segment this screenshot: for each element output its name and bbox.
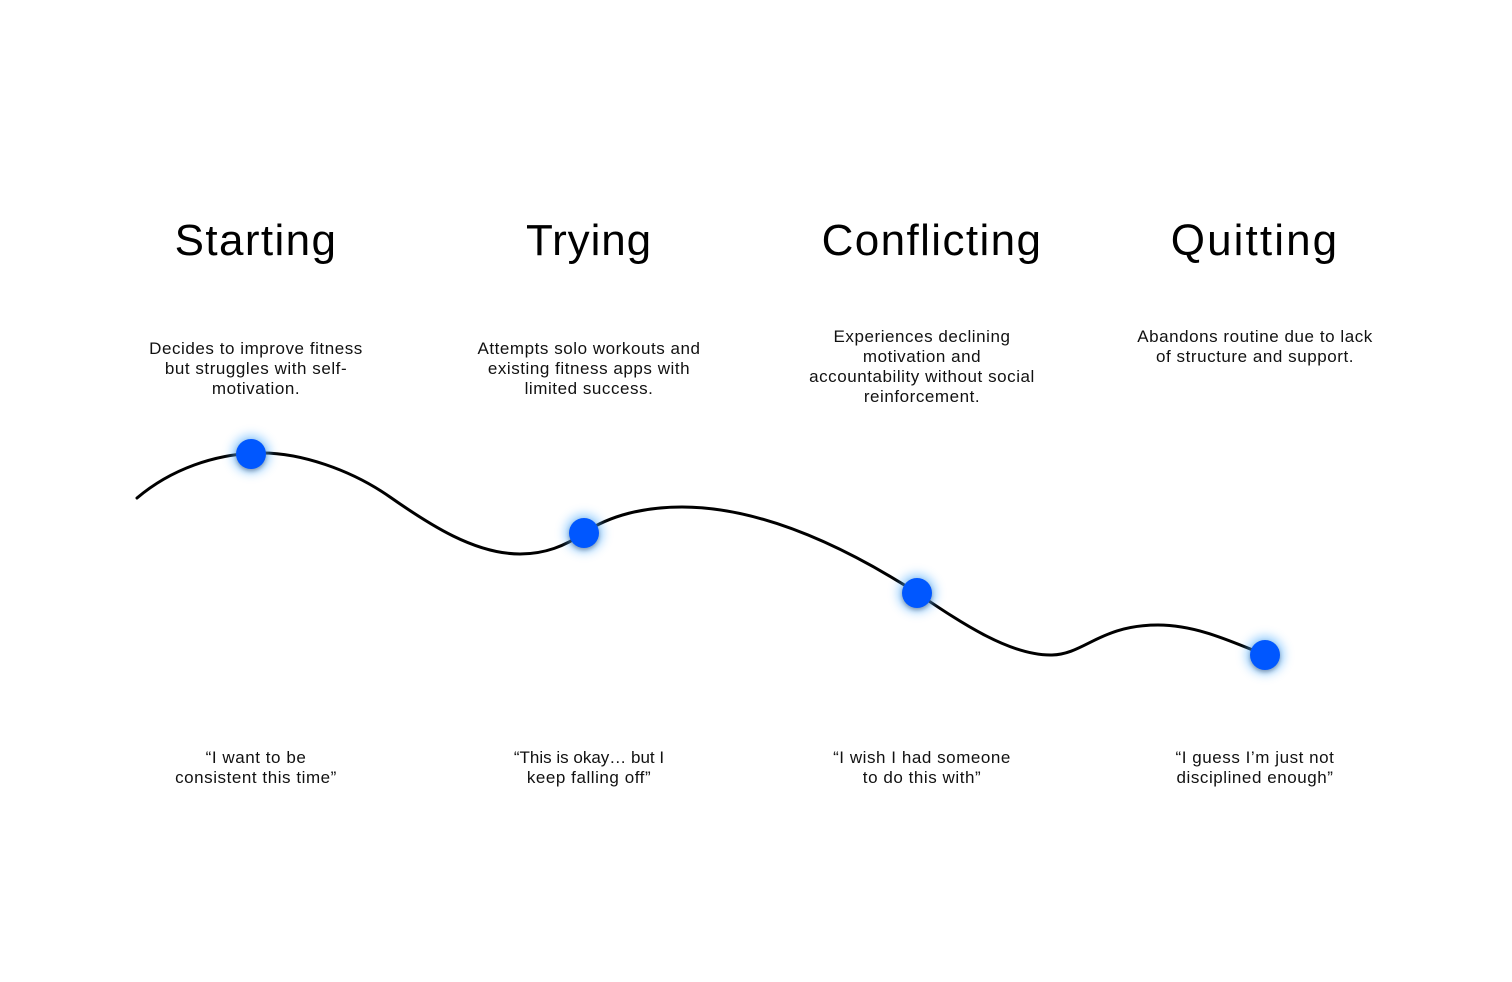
quote: Starting: “I want to be [206, 748, 306, 767]
quote: Trying: keep falling off” [527, 768, 651, 787]
quote: Starting [175, 748, 337, 787]
marker: Starting [232, 435, 270, 473]
marker: Trying [565, 514, 603, 552]
quote: Conflicting: to do this with” [863, 768, 981, 787]
description: Starting [149, 339, 363, 398]
description: Trying [477, 339, 701, 398]
quote: Starting: consistent this time” [175, 768, 337, 787]
quote: Conflicting: “I wish I had someone [833, 748, 1011, 767]
quote: Quitting [1176, 748, 1334, 787]
quote: Conflicting [833, 748, 1011, 787]
description: Quitting: Abandons routine due to lack [1137, 327, 1373, 346]
quote: Trying [514, 748, 664, 787]
quote: Quitting: “I guess I’m just not [1176, 748, 1334, 767]
description: Trying: limited success. [525, 379, 653, 398]
description: Quitting: of structure and support. [1156, 347, 1354, 366]
description: Starting: but struggles with self- [165, 359, 347, 378]
description: Conflicting: motivation and [863, 347, 981, 366]
heading: Starting: Starting [175, 216, 337, 265]
description: Quitting [1137, 327, 1373, 366]
heading: Trying: Trying [526, 216, 652, 265]
quote: Trying: “This is okay… but I [514, 748, 664, 767]
description: Trying: existing fitness apps with [488, 359, 690, 378]
description: Conflicting [809, 327, 1035, 406]
heading: Quitting: Quitting [1171, 216, 1339, 265]
quote: Quitting: disciplined enough” [1177, 768, 1333, 787]
description: Starting: Decides to improve fitness [149, 339, 363, 358]
marker: Conflicting [898, 574, 936, 612]
description: Starting: motivation. [212, 379, 300, 398]
journey line [137, 453, 1265, 655]
description: Conflicting: accountability without social [809, 367, 1035, 386]
marker: Quitting [1246, 636, 1284, 674]
description: Conflicting: reinforcement. [864, 387, 980, 406]
heading: Conflicting: Conflicting [822, 216, 1042, 265]
description: Conflicting: Experiences declining [834, 327, 1010, 346]
description: Trying: Attempts solo workouts and [477, 339, 701, 358]
